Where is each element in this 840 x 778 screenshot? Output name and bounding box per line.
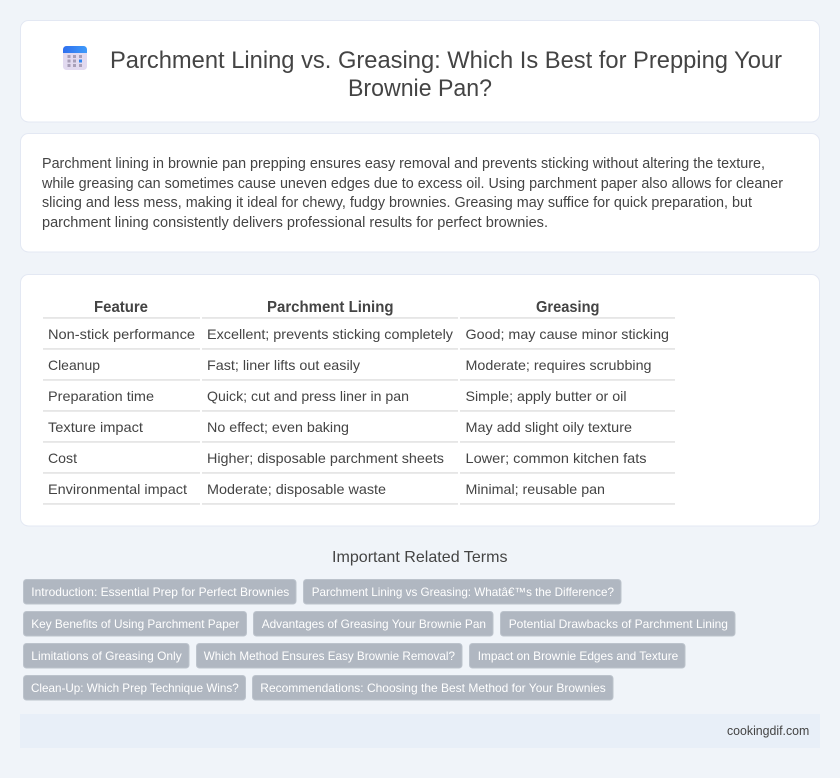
tag: clean-up <box>24 676 246 700</box>
table header row <box>94 299 600 316</box>
title: Brownie Pan? <box>348 75 492 102</box>
tag: potential drawbacks: Potential Drawbacks of Parchment Lining <box>509 617 728 631</box>
table row: cost <box>48 450 646 466</box>
heading: important related terms: Important Related Terms <box>332 549 508 566</box>
title <box>110 47 782 102</box>
tag: parchment vs greasing <box>304 580 621 604</box>
table row: texture impact: No effect; even baking <box>207 419 349 435</box>
table row: cleanup: Moderate; requires scrubbing <box>466 357 652 373</box>
tag: edges and texture <box>470 644 685 668</box>
text block: summary paragraph <box>41 156 783 231</box>
tag: easy removal: Which Method Ensures Easy Brownie Removal? <box>204 649 455 663</box>
related term tags <box>24 580 735 700</box>
tag: advantages of greasing <box>254 612 493 636</box>
table row: preparation time: Simple; apply butter or oil <box>466 388 626 404</box>
tag: introduction <box>24 580 296 604</box>
table row: non-stick performance: Good; may cause minor sticking <box>466 326 669 342</box>
table row: cleanup: Cleanup <box>48 357 100 373</box>
footer source text: cookingdif.com <box>727 724 809 738</box>
tag: parchment vs greasing: Parchment Lining vs Greasing: Whatâ€™s the Difference? <box>312 585 614 599</box>
table row: non-stick performance: Non-stick performance <box>48 326 195 342</box>
table row: environmental impact: Moderate; disposable waste <box>207 481 386 497</box>
tag: potential drawbacks <box>500 612 735 636</box>
tag: limitations of greasing: Limitations of Greasing Only <box>31 649 182 663</box>
table row: cost: Higher; disposable parchment sheets <box>207 450 444 466</box>
text block: summary paragraph: parchment lining consistently delivers professional results for perfect brownies. <box>42 215 548 231</box>
tag: advantages of greasing: Advantages of Greasing Your Brownie Pan <box>262 617 486 631</box>
table row: environmental impact <box>48 481 605 497</box>
table header row: Feature <box>94 299 148 316</box>
tag: limitations of greasing <box>24 644 189 668</box>
table row: preparation time: Quick; cut and press liner in pan <box>207 388 409 404</box>
table row: preparation time: Preparation time <box>48 388 154 404</box>
footer <box>20 714 820 748</box>
table row: cleanup <box>48 357 652 373</box>
table row: texture impact <box>48 419 632 435</box>
table header row: Parchment Lining <box>267 299 394 316</box>
table row: cleanup: Fast; liner lifts out easily <box>207 357 360 373</box>
table header row: Greasing <box>536 299 600 316</box>
table row: non-stick performance <box>48 326 669 342</box>
tag: key benefits: Key Benefits of Using Parchment Paper <box>31 617 239 631</box>
table row: texture impact: May add slight oily texture <box>466 419 632 435</box>
text block: summary paragraph: while greasing can sometimes cause uneven edges due to excess oil. Using parchment paper also allows for cleaner <box>41 176 783 192</box>
tag: recommendations <box>252 676 613 700</box>
table row: cost: Cost <box>48 450 77 466</box>
table row: non-stick performance: Excellent; prevents sticking completely <box>207 326 453 342</box>
table row: environmental impact: Environmental impact <box>48 481 187 497</box>
tag: key benefits <box>24 612 246 636</box>
table row: cost: Lower; common kitchen fats <box>466 450 646 466</box>
tag: introduction: Introduction: Essential Prep for Perfect Brownies <box>31 585 289 599</box>
icon: calendar <box>63 46 87 70</box>
table row: texture impact: Texture impact <box>48 419 143 435</box>
tag: easy removal <box>196 644 462 668</box>
text block: summary paragraph: Parchment lining in brownie pan prepping ensures easy removal and prevents sticking without altering the texture, <box>42 156 765 172</box>
tag: clean-up: Clean-Up: Which Prep Technique Wins? <box>31 681 239 695</box>
panel: header <box>20 20 820 122</box>
tag: edges and texture: Impact on Brownie Edges and Texture <box>478 649 679 663</box>
panel: comparison table <box>20 274 820 526</box>
title: Parchment Lining vs. Greasing: Which Is Best for Prepping Your <box>110 47 782 74</box>
tag: recommendations: Recommendations: Choosing the Best Method for Your Brownies <box>260 681 606 695</box>
text block: summary paragraph: slicing and less mess, making it ideal for chewy, fudgy brownies. Greasing may suffice for quick preparation, but <box>42 195 752 211</box>
table row: preparation time <box>48 388 626 404</box>
panel: summary <box>20 134 820 252</box>
table row: environmental impact: Minimal; reusable pan <box>466 481 605 497</box>
